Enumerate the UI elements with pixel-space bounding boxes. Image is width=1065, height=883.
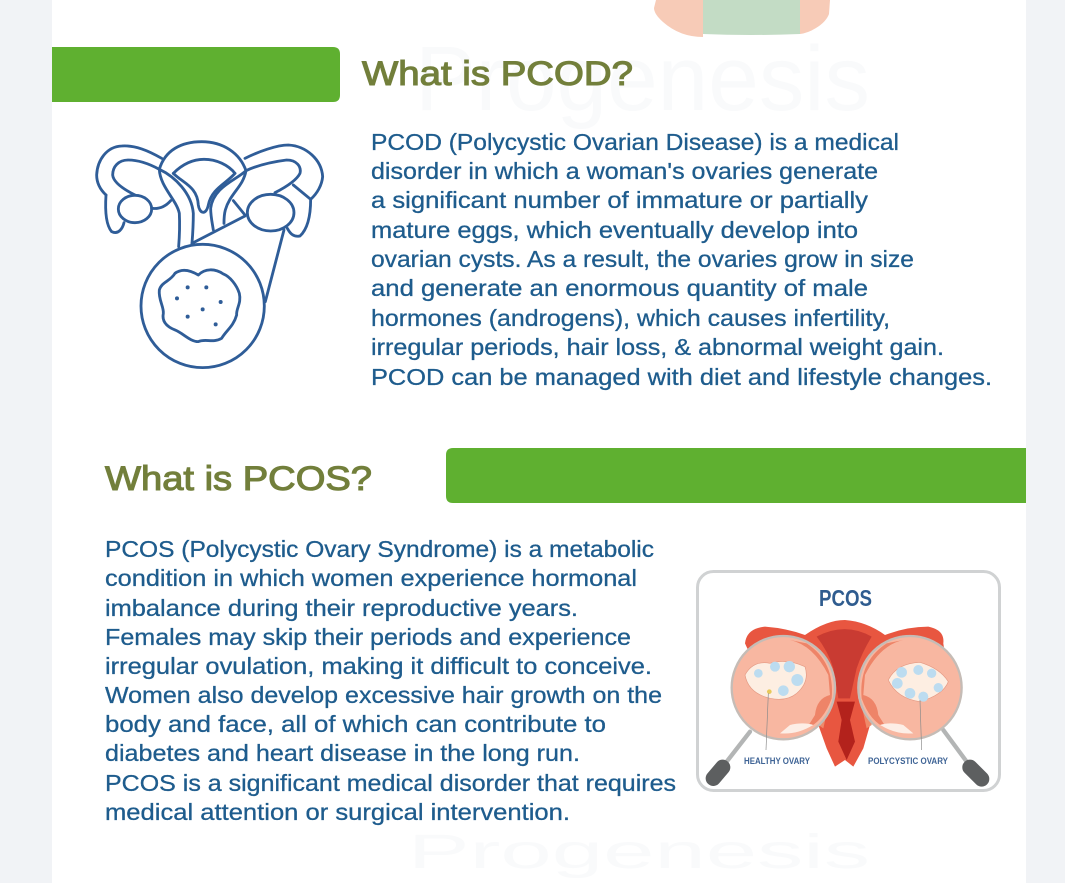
- watermark top: Progenesis: [415, 28, 870, 130]
- PCOD body text: PCOD (Polycystic Ovarian Disease) is a medical: [371, 129, 899, 155]
- PCOS body text: body and face, all of which can contribute to: [105, 711, 606, 737]
- PCOS body text: condition in which women experience hormonal: [105, 565, 637, 591]
- PCOS body text: diabetes and heart disease in the long run.: [105, 740, 580, 766]
- PCOS body text: PCOS is a significant medical disorder that requires: [105, 770, 676, 796]
- lens circle: [141, 244, 264, 368]
- PCOD body text: and generate an enormous quantity of male: [371, 275, 868, 301]
- handle right: [943, 730, 982, 779]
- PCOD body text: PCOD can be managed with diet and lifestyle changes.: [371, 364, 992, 390]
- PCOD heading: What is PCOD?: [362, 55, 633, 93]
- PCOD body text: [371, 129, 992, 390]
- PCOD body text: mature eggs, which eventually develop into: [371, 217, 858, 243]
- PCOD body text: irregular periods, hair loss, & abnormal weight gain.: [371, 334, 944, 360]
- right lens: [858, 636, 962, 750]
- PCOS body text: Women also develop excessive hair growth on the: [105, 682, 662, 708]
- PCOD green bar: [52, 47, 340, 102]
- polycystic ovary blob: [159, 270, 240, 342]
- PCOS green bar: [446, 448, 1026, 503]
- top illustration fragment: [654, 0, 830, 37]
- watermark bottom: Progenesis: [408, 826, 870, 879]
- PCOD body text: a significant number of immature or partially: [371, 187, 869, 213]
- PCOD body text: hormones (androgens), which causes infertility,: [371, 305, 890, 331]
- inner channels: [159, 169, 180, 247]
- PCOS body text: medical attention or surgical intervention.: [105, 799, 570, 825]
- handle left: [713, 732, 750, 778]
- right tube: [245, 145, 323, 199]
- pointer lines: [192, 216, 245, 243]
- PCOS heading: What is PCOS?: [105, 460, 372, 498]
- PCOD body text: disorder in which a woman's ovaries generate: [371, 158, 878, 184]
- PCOD body text: ovarian cysts. As a result, the ovaries grow in size: [371, 246, 914, 272]
- left tube: [97, 146, 162, 195]
- healthy ovary label: HEALTHY OVARY: [744, 756, 811, 767]
- PCOS body text: [105, 536, 676, 825]
- right ovary: [247, 194, 294, 231]
- follicle dots: [175, 285, 223, 326]
- uterus: [745, 620, 947, 767]
- left ovary: [118, 195, 152, 223]
- PCOS illustration card: [698, 572, 1000, 790]
- PCOS body text: irregular ovulation, making it difficult to conceive.: [105, 653, 652, 679]
- uterus outline: [159, 142, 246, 171]
- PCOS body text: PCOS (Polycystic Ovary Syndrome) is a metabolic: [105, 536, 654, 562]
- PCOS body text: imbalance during their reproductive years.: [105, 595, 578, 621]
- icon: uterus and ovary: [97, 142, 323, 368]
- PCOS body text: Females may skip their periods and experience: [105, 624, 631, 650]
- card title: PCOS: [819, 585, 872, 611]
- left lens: [732, 636, 835, 750]
- polycystic ovary label: POLYCYSTIC OVARY: [868, 756, 949, 767]
